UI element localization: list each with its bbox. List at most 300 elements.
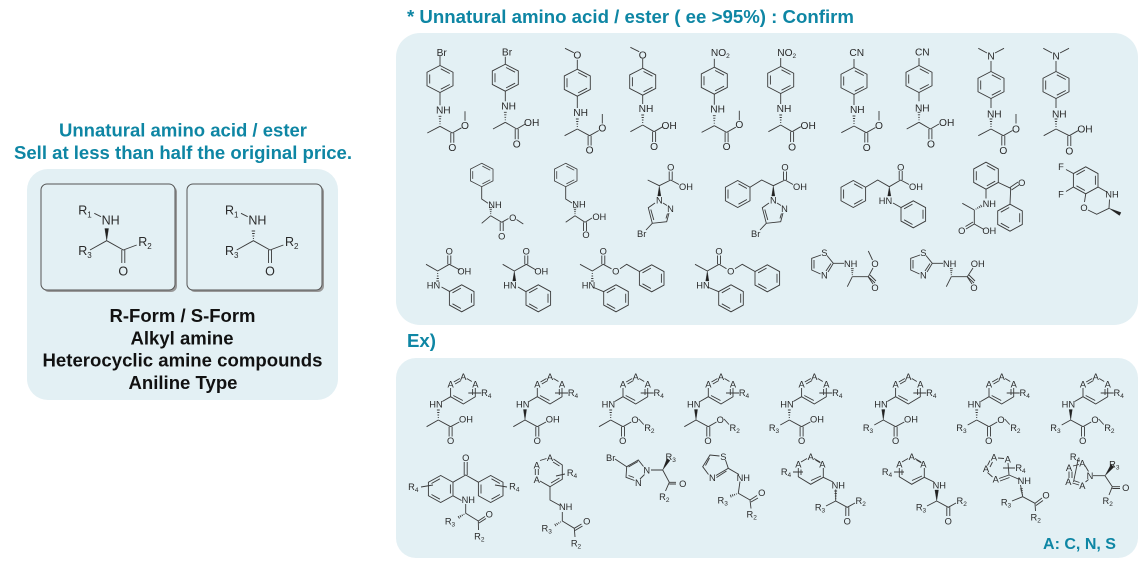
molecule: aza scaffold S: A	[920, 460, 927, 470]
molecule: bromopyrazole phenylalanine: O	[781, 162, 789, 172]
molecule: N-linked hetero scaffold: R	[1070, 452, 1077, 462]
molecule: aza scaffold S: R	[957, 496, 963, 506]
card: R-form structure: NH	[102, 214, 120, 228]
molecule: N-phenyl alanine S: OH	[534, 266, 548, 276]
molecule: scaffold R3 ester R: A	[999, 372, 1006, 382]
molecule: benzyl ester S: O	[715, 246, 723, 256]
molecule: Br ester: Br	[437, 48, 447, 59]
molecule: dimethylamino acid: O	[1065, 146, 1073, 158]
molecule: bromopyrazole phenylalanine: N	[770, 196, 777, 206]
molecule: benzophenone amino acid: OH	[982, 226, 996, 236]
molecule: seven-membered hetero scaffold: 3	[1008, 502, 1012, 510]
molecule: thiazole acid	[911, 248, 985, 293]
molecule: benzyl hetero scaffold: R	[567, 468, 574, 478]
molecule: scaffold R3 ester S: R	[1050, 423, 1057, 433]
card: R-form structure: R	[78, 204, 87, 218]
molecule: methoxy acid: OH	[661, 121, 677, 132]
molecule: Br acid	[492, 48, 539, 150]
molecule: methoxy ester: O	[586, 146, 594, 156]
molecule: scaffold R3 ester R: A	[986, 380, 993, 390]
molecule: dimethylamino ester: O	[1012, 124, 1020, 136]
molecule: aza scaffold S: A	[896, 460, 903, 470]
molecule: bromopyrazole scaffold: R	[659, 492, 666, 502]
molecule: scaffold R3 acid S: O	[892, 436, 899, 446]
molecule: N-linked hetero scaffold: A	[1079, 481, 1086, 491]
molecule: bromopyrazole scaffold: 2	[666, 497, 670, 504]
molecule: difluoro benzoxazine: F	[1058, 190, 1064, 200]
molecule: aza scaffold R: A	[819, 460, 826, 470]
molecule: scaffold ester R: R	[644, 423, 651, 433]
card: S-form structure: 3	[234, 251, 239, 260]
molecule: benzyl ester R: HN	[582, 280, 595, 290]
molecule: methoxy ester: O	[573, 51, 581, 62]
molecule: scaffold R3 acid R: A	[798, 380, 805, 390]
molecule: scaffold R3 acid R: A	[811, 372, 818, 382]
molecule: benzyl hetero scaffold	[534, 453, 590, 550]
molecule: scaffold R3 acid R: A	[823, 380, 830, 390]
molecule: aza scaffold R	[781, 452, 866, 526]
card: R-form structure	[41, 184, 177, 292]
molecule: N-benzyl ester	[470, 163, 523, 242]
molecule: aza scaffold R: A	[808, 452, 815, 462]
molecule: thiazole ester: S	[821, 248, 827, 258]
molecule: N-phenyl alanine R: HN	[427, 280, 440, 290]
molecule: methoxy ester: O	[598, 124, 606, 134]
molecule: scaffold ester R: A	[633, 372, 640, 382]
molecule: scaffold acid R: OH	[459, 415, 473, 425]
card: S-form structure: R	[225, 244, 234, 258]
molecule: benzyl hetero scaffold: 4	[574, 473, 578, 480]
molecule: thiazole ester: O	[871, 283, 879, 293]
panel: confirmed compounds	[396, 33, 1138, 325]
molecule: nitro acid	[768, 48, 816, 154]
molecule: difluoro benzoxazine: NH	[1105, 190, 1119, 200]
molecule: scaffold R3 ester S: R	[1104, 423, 1111, 433]
molecule: bromopyrazole scaffold: R	[666, 452, 672, 462]
molecule: scaffold R3 acid S: 4	[933, 393, 937, 400]
molecule: N-linked hetero scaffold: 3	[1116, 464, 1120, 472]
molecule: cyano acid: O	[927, 140, 935, 151]
card: R-form structure: 3	[87, 251, 92, 260]
molecule: difluoro benzoxazine: O	[1080, 203, 1088, 213]
molecule: scaffold ester S: O	[704, 436, 712, 446]
molecule: scaffold acid S	[513, 372, 579, 446]
molecule: scaffold ester R: 4	[660, 393, 664, 400]
molecule: scaffold ester S: A	[718, 372, 725, 382]
molecule: N-linked hetero scaffold: A	[1065, 477, 1072, 487]
molecule: bromopyrazole scaffold: N	[643, 466, 650, 476]
molecule: scaffold acid S: HN	[516, 400, 529, 410]
card: R-form structure: 2	[147, 242, 152, 251]
molecule: scaffold ester S: 2	[736, 428, 740, 435]
molecule: scaffold acid S: OH	[546, 415, 560, 425]
molecule: thiazole scaffold: S	[720, 452, 726, 462]
molecule: Br acid: Br	[502, 48, 513, 59]
card: S-form structure: R	[225, 204, 234, 218]
molecule: N-linked hetero scaffold: 2	[1109, 501, 1113, 508]
molecule: N-phenyl alanine R: O	[446, 246, 453, 256]
molecule: scaffold R3 acid S: OH	[904, 415, 918, 425]
molecule: nitro acid: 2	[793, 53, 797, 60]
molecule: scaffold ester S: HN	[687, 400, 700, 410]
molecule: seven-membered hetero scaffold	[983, 452, 1050, 524]
molecule: scaffold acid S: 4	[575, 393, 579, 400]
molecule: aza scaffold R: O	[844, 516, 851, 526]
molecule: scaffold acid R: O	[447, 436, 454, 446]
molecule: bromopyrazole phenylalanine: Br	[751, 229, 760, 239]
heading: left title	[14, 120, 352, 163]
molecule: scaffold ester R: 2	[651, 428, 655, 435]
molecule: thiazole scaffold: N	[709, 473, 716, 483]
molecule: thiazole acid: S	[920, 248, 926, 258]
card: R-form structure: 1	[87, 210, 92, 220]
molecule: aza scaffold S: R	[882, 467, 889, 477]
molecule: scaffold R3 acid R: O	[798, 436, 805, 446]
molecule: thiazole acid: OH	[971, 259, 985, 269]
molecule: nitro ester: NH	[710, 105, 725, 116]
molecule: seven-membered hetero scaffold: R	[1001, 498, 1008, 508]
molecule: scaffold R3 ester R: R	[1010, 423, 1017, 433]
molecule: seven-membered hetero scaffold: A	[991, 452, 998, 462]
molecule: seven-membered hetero scaffold: O	[1042, 490, 1050, 500]
molecule: seven-membered hetero scaffold: 4	[1022, 468, 1026, 475]
molecule: dimethylamino acid: OH	[1077, 124, 1093, 136]
molecule: benzyl hetero scaffold: O	[583, 516, 590, 526]
molecule: aza scaffold R: 3	[822, 508, 826, 514]
molecule: benzyl ester S: HN	[696, 280, 710, 290]
molecule: scaffold R3 ester S: O	[1091, 415, 1099, 425]
molecule: benzyl hetero scaffold: NH	[559, 502, 572, 512]
molecule: aza scaffold R: R	[815, 502, 822, 512]
molecule: bromopyrazole scaffold: N	[635, 478, 642, 488]
molecule: nitro ester: O	[723, 142, 731, 153]
text block: compound types: Alkyl amine	[130, 328, 234, 348]
molecule: benzyl hetero scaffold: R	[542, 524, 548, 534]
molecule: thiazole acid: N	[920, 270, 927, 280]
molecule: scaffold acid R: HN	[429, 400, 443, 410]
card: R-form structure: R	[78, 244, 87, 258]
molecule: benzophenone amino acid: O	[1018, 178, 1025, 188]
molecule: cyano acid: CN	[915, 48, 930, 59]
molecule: scaffold R3 ester R: R	[1020, 388, 1026, 398]
heading: examples: Ex)	[407, 331, 436, 351]
molecule: nitro acid: OH	[801, 121, 816, 132]
molecule: scaffold R3 ester S: HN	[1062, 400, 1075, 410]
molecule: cyano acid: NH	[915, 103, 930, 114]
molecule: nitro acid: NO	[777, 48, 793, 59]
molecule: scaffold acid R	[427, 372, 492, 446]
molecule: scaffold R3 ester R: O	[997, 415, 1005, 425]
molecule: N-linked hetero scaffold: O	[1122, 483, 1129, 493]
molecule: aza scaffold R: R	[856, 496, 862, 506]
molecule: scaffold R3 acid R: R	[769, 423, 776, 433]
molecule: cyano ester: O	[863, 143, 871, 154]
panel: example scaffolds	[396, 358, 1138, 558]
molecule: N-benzyl acid: OH	[592, 212, 606, 222]
molecule: scaffold ester S: 4	[746, 393, 750, 400]
molecule: scaffold R3 ester S: 3	[1057, 428, 1061, 435]
molecule: benzophenone amino acid	[958, 162, 1025, 236]
molecule: dimethylamino ester: O	[999, 146, 1007, 157]
molecule: bromopyrazole phenylalanine: OH	[793, 182, 807, 192]
molecule: Br ester: NH	[436, 105, 451, 116]
molecule: N-benzyl acid: NH	[572, 200, 586, 210]
molecule: scaffold R3 ester R: A	[1011, 380, 1018, 390]
molecule: scaffold ester S: O	[717, 415, 724, 425]
molecule: benzophenone scaffold	[408, 453, 520, 544]
molecule: scaffold ester R: HN	[602, 400, 615, 410]
molecule: dimethylamino ester	[978, 48, 1020, 157]
molecule: scaffold R3 acid S: A	[905, 372, 912, 382]
molecule: scaffold R3 ester S: A	[1105, 380, 1112, 390]
molecule: aza scaffold S: A	[909, 452, 916, 462]
molecule: benzyl hetero scaffold: A	[547, 453, 554, 463]
molecule: bromopyrazole acid	[637, 162, 693, 239]
molecule: thiazole ester	[812, 248, 879, 293]
molecule: methoxy ester: NH	[573, 108, 588, 119]
molecule: scaffold ester S: A	[705, 380, 712, 390]
molecule: N-benzyl ester: NH	[488, 200, 502, 210]
molecule: cyano ester: O	[875, 121, 883, 132]
molecule: scaffold R3 acid R	[769, 372, 843, 446]
molecule: N-benzyl ester: O	[498, 232, 505, 242]
molecule: nitro acid: NH	[777, 104, 791, 115]
molecule: bromopyrazole phenylalanine: N	[781, 204, 788, 214]
molecule: benzophenone scaffold: 3	[452, 522, 456, 528]
molecule: difluoro benzoxazine	[1058, 162, 1121, 216]
molecule: seven-membered hetero scaffold: R	[1015, 463, 1022, 473]
molecule: seven-membered hetero scaffold: A	[1005, 454, 1012, 464]
molecule: thiazole ester: N	[821, 270, 828, 280]
molecule: bromopyrazole phenylalanine	[725, 162, 807, 239]
molecule: benzophenone scaffold: R	[474, 532, 481, 542]
text block: compound types: Heterocyclic amine compounds	[42, 350, 322, 370]
molecule: scaffold ester S	[684, 372, 750, 446]
molecule: aza scaffold S: 2	[963, 501, 967, 508]
molecule: scaffold R3 ester S: 4	[1120, 393, 1124, 400]
molecule: bromopyrazole acid: OH	[679, 182, 693, 192]
molecule: scaffold R3 ester R: O	[985, 436, 992, 446]
molecule: benzophenone scaffold: O	[462, 453, 469, 463]
molecule: nitro ester: O	[735, 120, 743, 131]
molecule: benzophenone amino acid: O	[958, 226, 965, 236]
molecule: scaffold R3 ester S: R	[1114, 388, 1120, 398]
card: S-form structure: R	[285, 235, 294, 249]
molecule: scaffold R3 acid S	[863, 372, 937, 446]
molecule: scaffold ester R: A	[645, 380, 652, 390]
molecule: cyano ester: NH	[850, 105, 865, 116]
molecule: thiazole scaffold: 2	[753, 514, 757, 522]
molecule: thiazole scaffold: O	[758, 488, 765, 498]
molecule: N-benzyl acid: O	[582, 230, 590, 240]
molecule: cyano acid: OH	[939, 118, 954, 129]
molecule: dimethylamino ester: NH	[987, 110, 1002, 120]
molecule: scaffold ester R: R	[654, 388, 660, 398]
molecule: scaffold ester S: A	[730, 380, 737, 390]
molecule: scaffold R3 ester S	[1050, 372, 1124, 446]
molecule: scaffold R3 ester S: A	[1093, 372, 1100, 382]
molecule: bromopyrazole scaffold	[606, 452, 686, 504]
molecule: Br acid: O	[513, 140, 521, 151]
molecule: seven-membered hetero scaffold: A	[993, 474, 1000, 484]
molecule: aza scaffold R: A	[795, 460, 802, 470]
molecule: benzophenone scaffold: 4	[415, 487, 419, 494]
molecule: scaffold R3 ester R: 2	[1017, 428, 1021, 435]
card: R-form structure: R	[138, 235, 147, 249]
card: S-form structure: 1	[234, 210, 239, 220]
molecule: benzyl hetero scaffold: 2	[578, 544, 582, 550]
molecule: scaffold acid S: A	[547, 372, 554, 382]
molecule: methoxy acid: O	[650, 142, 658, 153]
molecule: methoxy acid: NH	[639, 104, 653, 115]
card: S-form structure: O	[265, 264, 275, 278]
molecule: aza scaffold R: NH	[832, 480, 845, 490]
molecule: scaffold R3 ester S: 2	[1111, 428, 1115, 435]
molecule: benzyl hetero scaffold: A	[534, 460, 541, 470]
molecule: N-linked hetero scaffold: A	[1079, 458, 1086, 468]
molecule: scaffold R3 acid R: 4	[839, 393, 843, 400]
molecule: Br acid: OH	[524, 118, 539, 129]
molecule: methoxy ester	[564, 48, 606, 156]
molecule: scaffold R3 ester R	[956, 372, 1030, 446]
molecule: cyano ester: CN	[849, 48, 864, 59]
molecule: scaffold acid S: R	[568, 388, 575, 398]
molecule: N-phenyl alanine R: OH	[457, 266, 471, 276]
molecule: aza scaffold S: R	[916, 502, 923, 512]
molecule: scaffold R3 acid R: OH	[810, 415, 824, 425]
molecule: cyano acid	[906, 48, 954, 150]
molecule: N-linked hetero scaffold: R	[1103, 496, 1109, 506]
molecule: scaffold acid S: A	[534, 380, 541, 390]
molecule: aza scaffold S: O	[945, 516, 952, 526]
molecule: thiazole acid: NH	[943, 259, 956, 269]
text block: compound types: R-Form / S-Form	[110, 306, 256, 326]
molecule: N-linked hetero scaffold: A	[1066, 463, 1073, 473]
molecule: benzophenone scaffold: NH	[462, 495, 475, 505]
molecule: benzophenone scaffold: 2	[481, 536, 485, 544]
molecule: scaffold R3 acid S: R	[863, 423, 870, 433]
molecule: scaffold R3 acid S: R	[926, 388, 933, 398]
card: R-form structure: O	[118, 264, 128, 278]
molecule: N-benzyl acid	[554, 163, 606, 240]
molecule: benzyl hetero scaffold: R	[571, 538, 578, 548]
molecule: dimethylamino acid: NH	[1052, 110, 1067, 120]
card: S-form structure	[187, 184, 324, 292]
molecule: benzophenone scaffold: O	[486, 510, 493, 520]
molecule: aza scaffold R: 4	[788, 472, 792, 479]
molecule: scaffold R3 acid R: 3	[776, 428, 780, 435]
molecule: Br acid: NH	[501, 101, 516, 112]
molecule: bromopyrazole acid: N	[667, 204, 674, 214]
molecule: scaffold R3 acid S: A	[917, 380, 924, 390]
molecule: aza scaffold S: NH	[933, 480, 946, 490]
molecule: N-phenyl alanine S: O	[523, 246, 530, 256]
molecule: scaffold acid S: A	[559, 380, 566, 390]
note: atom legend: A: C, N, S	[1043, 536, 1116, 553]
molecule: thiazole ester: NH	[844, 259, 857, 269]
molecule: benzyl ester S: O	[727, 266, 734, 276]
molecule: Br ester	[427, 48, 469, 154]
molecule: bromopyrazole scaffold: O	[679, 479, 686, 489]
molecule: seven-membered hetero scaffold: A	[983, 464, 990, 474]
molecule: aza scaffold S	[882, 452, 967, 526]
molecule: N-phenyl phenylalanine: HN	[879, 196, 892, 206]
molecule: benzyl ester S	[695, 246, 780, 312]
molecule: N-phenyl alanine R	[426, 246, 474, 312]
molecule: Br ester: O	[448, 143, 456, 154]
molecule: benzyl ester R: O	[600, 246, 607, 256]
molecule: bromopyrazole acid: Br	[637, 229, 646, 239]
molecule: thiazole scaffold: 3	[724, 500, 728, 508]
molecule: N-phenyl phenylalanine	[841, 162, 926, 228]
molecule: seven-membered hetero scaffold: 2	[1037, 518, 1041, 524]
molecule: scaffold R3 acid S: HN	[874, 400, 888, 410]
molecule: N-linked hetero scaffold: N	[1087, 471, 1093, 481]
molecule: scaffold R3 acid S: 3	[870, 428, 874, 435]
molecule: dimethylamino acid	[1043, 48, 1093, 158]
panel: general structure	[27, 169, 338, 400]
molecule: aza scaffold R: R	[781, 467, 788, 477]
molecule: scaffold acid R: R	[481, 388, 488, 398]
molecule: scaffold R3 acid S: A	[892, 380, 899, 390]
molecule: methoxy acid	[630, 47, 677, 153]
molecule: cyano ester	[841, 48, 883, 154]
molecule: scaffold acid R: 4	[488, 393, 492, 400]
molecule: thiazole scaffold: NH	[737, 473, 750, 483]
molecule: bromopyrazole acid: O	[667, 162, 674, 172]
molecule: scaffold R3 ester S: O	[1079, 436, 1086, 446]
molecule: aza scaffold S: 4	[889, 472, 893, 479]
molecule: scaffold R3 ester R: HN	[968, 400, 981, 410]
heading: left title: Sell at less than half the original price.	[14, 143, 352, 163]
molecule: benzyl hetero scaffold: A	[534, 475, 541, 485]
molecule: N-phenyl phenylalanine: OH	[909, 182, 923, 192]
molecule: N-benzyl ester: O	[509, 213, 516, 223]
molecule: benzyl ester R	[580, 246, 664, 312]
molecule: scaffold ester S: R	[730, 423, 736, 433]
molecule: thiazole scaffold: R	[747, 510, 753, 520]
molecule: aza scaffold R: 2	[862, 501, 866, 508]
molecule: N-phenyl alanine S	[503, 246, 551, 312]
molecule: seven-membered hetero scaffold: R	[1031, 512, 1037, 522]
molecule: scaffold R3 acid R: HN	[780, 400, 794, 410]
molecule: benzophenone scaffold: R	[445, 516, 452, 526]
molecule: benzyl ester R: O	[612, 266, 619, 276]
molecule: scaffold acid R: A	[460, 372, 467, 382]
molecule: scaffold ester S: R	[739, 388, 746, 398]
molecule: benzophenone scaffold: R	[509, 482, 516, 492]
molecule: dimethylamino acid: N	[1052, 52, 1060, 62]
molecule: thiazole acid: O	[970, 283, 978, 293]
molecule: benzophenone scaffold: 4	[516, 486, 520, 494]
molecule: scaffold ester R	[599, 372, 664, 446]
molecule: N-linked hetero scaffold: 4	[1077, 457, 1081, 464]
molecule: nitro acid: O	[788, 143, 796, 154]
molecule: seven-membered hetero scaffold: NH	[1018, 476, 1031, 486]
molecule: scaffold ester R: O	[619, 436, 626, 446]
molecule: scaffold acid R: A	[472, 380, 479, 390]
molecule: scaffold R3 ester R: 4	[1026, 393, 1030, 400]
card: S-form structure: 2	[294, 242, 299, 251]
molecule: scaffold acid R: A	[447, 380, 454, 390]
molecule: thiazole scaffold	[703, 452, 765, 522]
molecule: scaffold ester R: A	[620, 380, 627, 390]
text block: compound types: Aniline Type	[128, 373, 238, 393]
heading: confirmed compounds: * Unnatural amino acid / ester ( ee >95%) : Confirm	[407, 7, 854, 27]
molecule: dimethylamino ester: N	[987, 52, 995, 62]
molecule: bromopyrazole scaffold: Br	[606, 453, 615, 463]
molecule: difluoro benzoxazine: F	[1058, 162, 1064, 172]
